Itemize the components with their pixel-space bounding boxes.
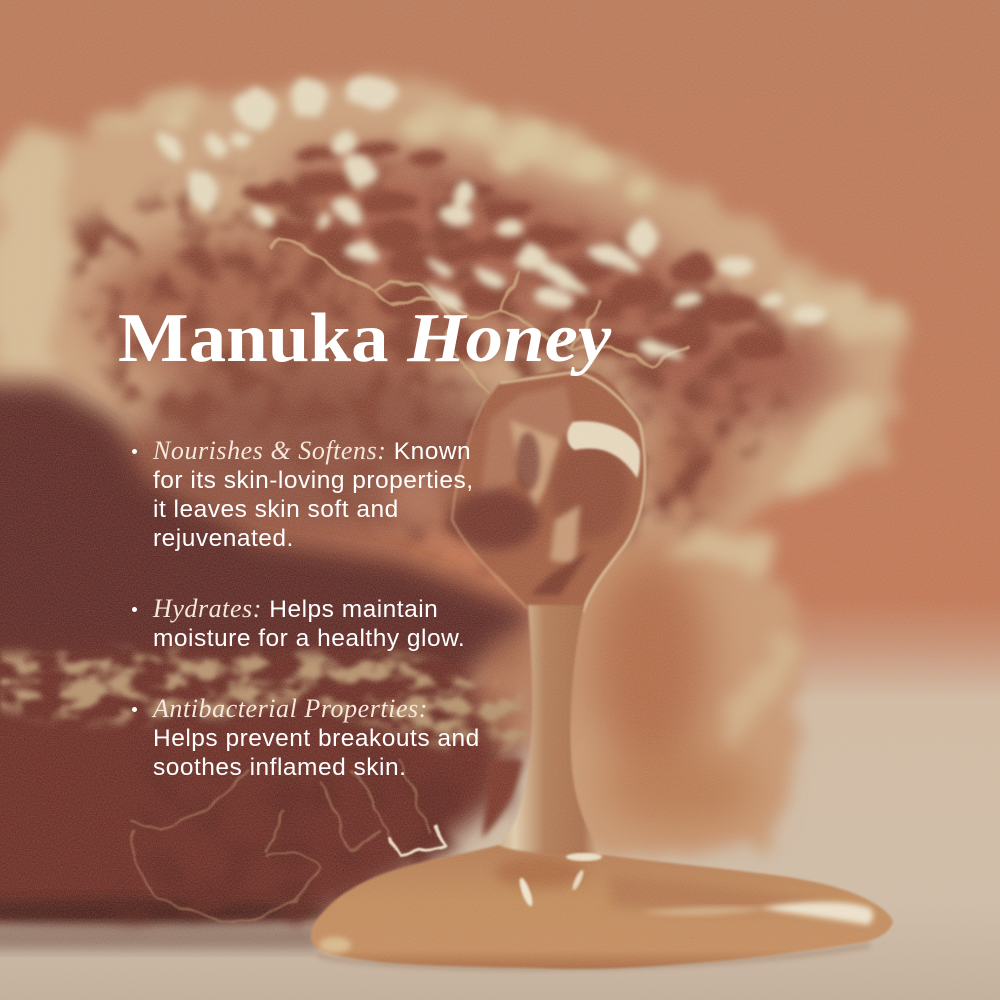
back comb mass bbox=[0, 80, 908, 850]
honey stream bbox=[495, 605, 605, 860]
pale rim of the comb bbox=[25, 100, 880, 740]
benefit: nourishes and softens: Nourishes & Softens: Known bbox=[153, 436, 471, 465]
honey puddle bbox=[311, 845, 893, 969]
bright glints near puddle bbox=[390, 825, 445, 858]
cream highlights on the comb bbox=[151, 77, 827, 363]
comb interior tones bbox=[90, 112, 840, 830]
golden cell walls bbox=[270, 240, 690, 395]
benefit: hydrates: Hydrates: Helps maintain bbox=[153, 594, 438, 623]
benefit: hydrates: moisture for a healthy glow. bbox=[153, 625, 465, 652]
mottled comb texture bbox=[66, 160, 805, 577]
benefit: antibacterial properties bbox=[153, 694, 480, 782]
title: Manuka Honey bbox=[118, 300, 611, 377]
lower comb cells bbox=[128, 706, 530, 930]
darkest shadow at comb base bbox=[0, 898, 330, 926]
soft yellow cells on the far edge bbox=[161, 108, 654, 202]
dark foreground comb bbox=[0, 382, 530, 926]
lower comb lines bbox=[130, 760, 430, 921]
benefit: nourishes and softens: for its skin-loving properties, bbox=[153, 467, 474, 494]
benefit: hydrates bbox=[153, 594, 465, 653]
benefit: antibacterial properties: Helps prevent breakouts and bbox=[153, 725, 480, 752]
lace band of the lower comb bbox=[0, 642, 526, 754]
table shadow bbox=[0, 926, 320, 950]
honey bulb bbox=[450, 369, 648, 612]
benefit: nourishes and softens: it leaves skin soft and bbox=[153, 496, 399, 523]
benefit: nourishes and softens: rejuvenated. bbox=[153, 525, 294, 552]
benefit: antibacterial properties: Antibacterial Properties: bbox=[153, 694, 428, 723]
middle comb tones bbox=[384, 472, 565, 750]
benefit: antibacterial properties: soothes inflamed skin. bbox=[153, 754, 406, 781]
dark gap beside stream bbox=[482, 760, 522, 838]
benefit: nourishes and softens bbox=[153, 436, 474, 553]
dark honeycomb cells bbox=[240, 142, 784, 360]
